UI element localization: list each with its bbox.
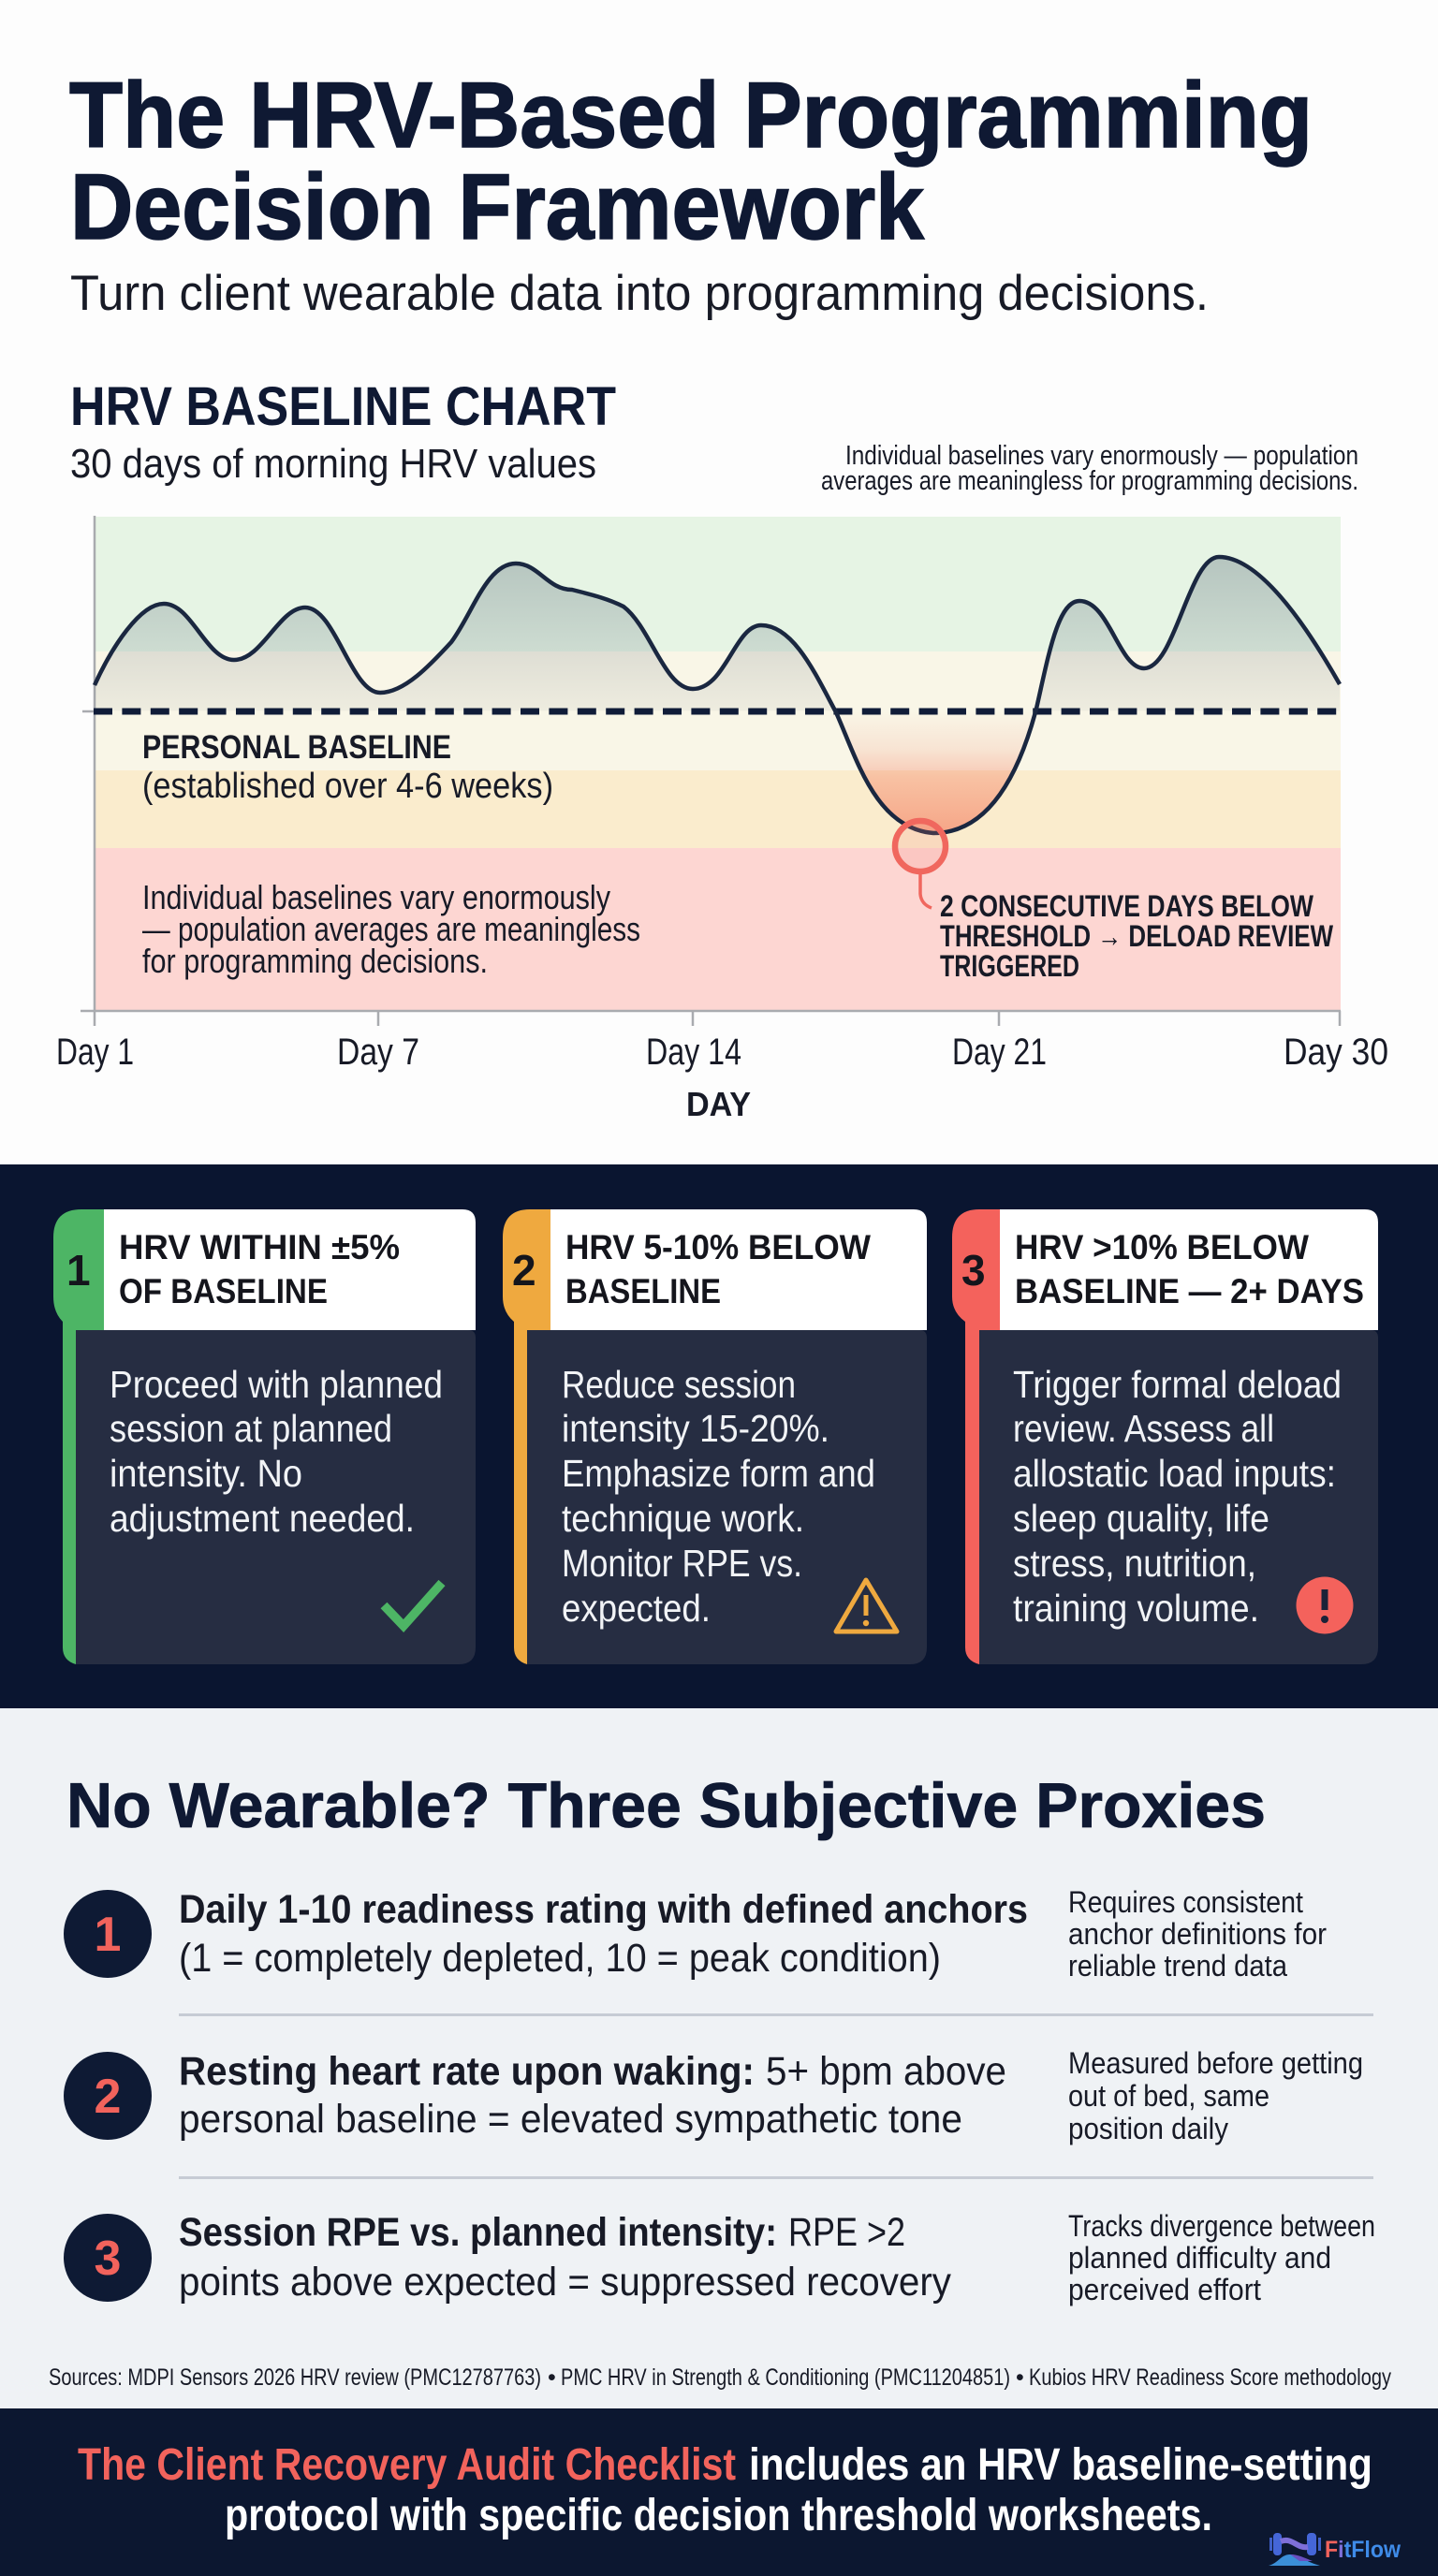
card 1: within baseline: 1: [66, 1246, 91, 1295]
card 3: well below baseline: 3: [961, 1246, 986, 1295]
deload callout: 2 CONSECUTIVE DAYS BELOW: [940, 889, 1314, 923]
card 3: well below baseline: sleep quality, life: [1013, 1497, 1269, 1540]
zone: caution: [95, 770, 1341, 848]
HRV line: [95, 557, 1340, 833]
x axis labels: Day 14: [646, 1032, 741, 1073]
sources: Sources: MDPI Sensors 2026 HRV review (PMC12787763): [49, 2364, 541, 2391]
card 2: moderately below baseline: Emphasize form and: [562, 1452, 875, 1495]
call to action text: includes an HRV baseline-setting: [749, 2440, 1372, 2490]
proxy 1: 1: [95, 1908, 121, 1962]
icon: alert circle: [1296, 1576, 1354, 1634]
proxy 2: 5+ bpm above: [766, 2049, 1006, 2094]
card 1: within baseline: intensity. No: [110, 1452, 302, 1495]
card 1: within baseline: Proceed with planned: [110, 1363, 443, 1406]
card 3: well below baseline: allostatic load inputs:: [1013, 1452, 1336, 1495]
subtitle: Turn client wearable data into programming decisions.: [70, 266, 1209, 321]
trigger marker ring: [895, 821, 946, 871]
zone: deload: [95, 848, 1341, 1011]
title: Decision Framework: [70, 154, 925, 258]
baseline variance note: Individual baselines vary enormously: [142, 878, 610, 916]
card 1: within baseline: OF BASELINE: [119, 1272, 328, 1310]
zone: above baseline: [95, 517, 1341, 651]
card 3: well below baseline: [952, 1209, 1378, 1664]
title: The HRV-Based Programming: [69, 63, 1313, 167]
call to action text: [78, 2440, 1372, 2540]
proxy 3: Tracks divergence between: [1068, 2209, 1375, 2243]
call to action text: protocol with specific decision threshold worksheets.: [225, 2491, 1212, 2540]
proxy 1: Requires consistent: [1068, 1885, 1303, 1919]
card 3: well below baseline: Trigger formal deload: [1013, 1363, 1342, 1406]
panel: footer call to action: [0, 2408, 1438, 2576]
chart: HRV baseline: [56, 516, 1388, 1123]
zone: near baseline: [95, 651, 1341, 770]
proxy 3: points above expected = suppressed recovery: [179, 2260, 951, 2305]
x axis labels: Day 7: [337, 1032, 419, 1073]
proxy 3: 3: [95, 2232, 121, 2286]
proxy 1: (1 = completely depleted, 10 = peak condition): [179, 1936, 941, 1981]
page background: [0, 0, 1438, 1164]
proxy 2: Measured before getting: [1068, 2046, 1363, 2080]
proxy 2: out of bed, same: [1068, 2079, 1269, 2113]
chart heading: [70, 376, 616, 487]
card 2: moderately below baseline: intensity 15-20%.: [562, 1407, 829, 1450]
deload callout: TRIGGERED: [940, 949, 1079, 983]
title: [69, 63, 1313, 258]
sources: [49, 2364, 1391, 2391]
card 3: well below baseline: training volume.: [1013, 1587, 1259, 1630]
sources: PMC HRV in Strength & Conditioning (PMC11204851): [561, 2364, 1010, 2391]
card 1: within baseline: session at planned: [110, 1407, 392, 1450]
panel: subjective proxies: [0, 1708, 1438, 2408]
chart heading: HRV BASELINE CHART: [70, 376, 616, 437]
card 2: moderately below baseline: [503, 1209, 927, 1664]
proxy 3: planned difficulty and: [1068, 2241, 1331, 2275]
logo: FitFlow: FitFlow: [1325, 2537, 1401, 2563]
proxy 3: RPE >2: [788, 2210, 905, 2255]
card 2: moderately below baseline: BASELINE: [565, 1272, 721, 1310]
x axis labels: Day 30: [1284, 1032, 1388, 1073]
axes: [81, 516, 1341, 1026]
personal baseline label: [142, 729, 553, 806]
logo: FitFlow: [1269, 2533, 1401, 2566]
sources: •: [548, 2364, 556, 2391]
baseline variance note: — population averages are meaningless: [142, 910, 640, 948]
proxy 1: reliable trend data: [1068, 1949, 1287, 1983]
card 2: moderately below baseline: 2: [512, 1246, 536, 1295]
proxies heading: No Wearable? Three Subjective Proxies: [66, 1770, 1266, 1841]
panel: decision thresholds: [0, 1164, 1438, 1708]
card 2: moderately below baseline: HRV 5-10% BELOW: [565, 1228, 871, 1266]
baseline variance note: for programming decisions.: [142, 942, 488, 980]
card 3: well below baseline: stress, nutrition,: [1013, 1542, 1256, 1585]
x axis labels: [56, 1032, 1388, 1073]
card 1: within baseline: adjustment needed.: [110, 1497, 415, 1540]
card 3: well below baseline: review. Assess all: [1013, 1407, 1274, 1450]
baseline variance note: [142, 878, 640, 980]
card 2: moderately below baseline: expected.: [562, 1587, 711, 1630]
proxy 1: [64, 1885, 1327, 1983]
HRV area fill: [95, 557, 1340, 833]
card 2: moderately below baseline: Reduce session: [562, 1363, 796, 1406]
proxy 3: perceived effort: [1068, 2273, 1261, 2306]
marker connector: [920, 872, 932, 908]
sources: •: [1016, 2364, 1024, 2391]
chart note: [821, 441, 1358, 496]
card 1: within baseline: [53, 1209, 476, 1664]
proxy 2: position daily: [1068, 2112, 1228, 2145]
proxy 3: [64, 2209, 1375, 2306]
card 2: moderately below baseline: technique work.: [562, 1497, 804, 1540]
x axis labels: Day 1: [56, 1032, 134, 1073]
call to action text: The Client Recovery Audit Checklist: [78, 2440, 736, 2490]
card 3: well below baseline: BASELINE — 2+ DAYS: [1015, 1272, 1364, 1310]
icon: warning triangle: [836, 1580, 897, 1632]
card 3: well below baseline: HRV >10% BELOW: [1015, 1228, 1309, 1266]
proxy 2: 2: [95, 2070, 121, 2124]
proxy 1: anchor definitions for: [1068, 1917, 1327, 1951]
card 1: within baseline: HRV WITHIN ±5%: [119, 1228, 400, 1266]
x axis labels: Day 21: [952, 1032, 1047, 1073]
icon: check mark: [384, 1583, 442, 1626]
proxy 2: Resting heart rate upon waking:: [179, 2049, 755, 2094]
proxy 3: Session RPE vs. planned intensity:: [179, 2210, 777, 2255]
personal baseline dashed line: [94, 708, 1337, 715]
proxy 1: Daily 1-10 readiness rating with defined anchors: [179, 1887, 1028, 1932]
deload callout: THRESHOLD → DELOAD REVIEW: [940, 919, 1334, 953]
card 2: moderately below baseline: Monitor RPE vs.: [562, 1542, 802, 1585]
proxy 2: [64, 2046, 1363, 2145]
personal baseline label: (established over 4-6 weeks): [142, 767, 553, 806]
proxy 2: personal baseline = elevated sympathetic tone: [179, 2097, 962, 2142]
deload callout: [940, 889, 1334, 983]
personal baseline label: PERSONAL BASELINE: [142, 729, 451, 766]
x axis title: DAY: [686, 1085, 751, 1123]
chart heading: 30 days of morning HRV values: [70, 441, 596, 487]
